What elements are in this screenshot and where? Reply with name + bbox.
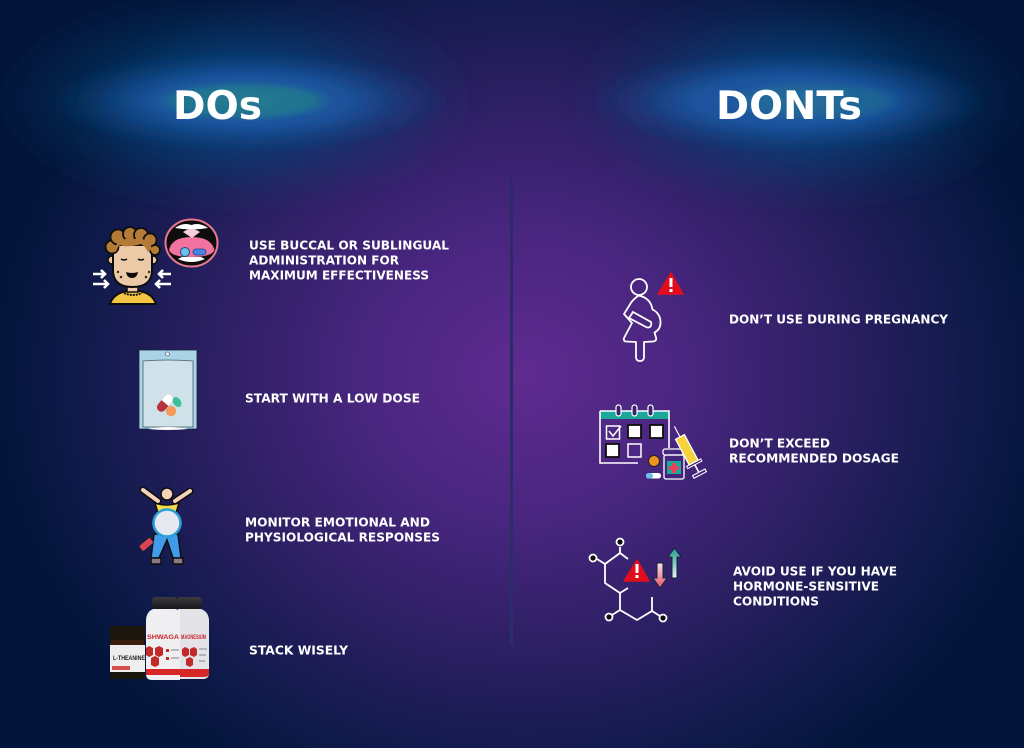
icon: pill pouch bbox=[139, 350, 197, 430]
icon: person under magnifier bbox=[139, 488, 190, 564]
panel: DOs column bbox=[93, 220, 449, 680]
text: buccal or sublingual: MAXIMUM EFFECTIVENESS bbox=[249, 268, 429, 282]
heading: DOs: DOs bbox=[173, 84, 262, 129]
text: monitor responses: MONITOR EMOTIONAL AND bbox=[245, 516, 430, 530]
text: monitor responses: PHYSIOLOGICAL RESPONSES bbox=[245, 530, 440, 544]
bottle: ashwagandha: SHWAGA bbox=[147, 634, 179, 641]
text: pregnancy: DON’T USE DURING PREGNANCY bbox=[729, 312, 948, 326]
text: dosage: DON’T EXCEED bbox=[729, 436, 830, 450]
text: buccal or sublingual: ADMINISTRATION FOR bbox=[249, 254, 399, 268]
bottle: magnesium: MAGNESIUM bbox=[181, 634, 206, 641]
centre divider bbox=[510, 166, 513, 645]
text: hormone-sensitive: HORMONE-SENSITIVE bbox=[733, 580, 879, 594]
heading: DONTs: DONTs bbox=[716, 84, 862, 129]
text: stack wisely: STACK WISELY bbox=[249, 644, 348, 658]
text: dosage: RECOMMENDED DOSAGE bbox=[729, 452, 899, 466]
jar: l-theanine: L-THEANINE bbox=[113, 656, 145, 662]
icon: molecule with warning and hormone arrows bbox=[590, 538, 681, 622]
hair bbox=[106, 227, 160, 255]
icon: supplement bottles bbox=[110, 597, 209, 680]
text: hormone-sensitive bbox=[733, 564, 897, 608]
icon: face with mouth and buccal pills bbox=[93, 220, 218, 304]
text: low dose: START WITH A LOW DOSE bbox=[245, 392, 420, 406]
text: buccal or sublingual bbox=[249, 238, 449, 282]
icon: arrows bbox=[93, 270, 171, 288]
mouth bubble bbox=[166, 220, 218, 266]
panel: DONTs column bbox=[590, 273, 948, 622]
text: hormone-sensitive: AVOID USE IF YOU HAVE bbox=[733, 564, 897, 578]
text: hormone-sensitive: CONDITIONS bbox=[733, 594, 819, 608]
text: buccal or sublingual: USE BUCCAL OR SUBLINGUAL bbox=[249, 238, 449, 252]
glow: DOs heading bbox=[0, 0, 480, 210]
glow: DONTs heading bbox=[565, 0, 1024, 210]
text: monitor responses bbox=[245, 516, 440, 544]
icon: calendar with medicine and syringe bbox=[600, 405, 707, 479]
icon: pregnant figure with warning bbox=[624, 273, 683, 361]
text: dosage bbox=[729, 436, 899, 466]
